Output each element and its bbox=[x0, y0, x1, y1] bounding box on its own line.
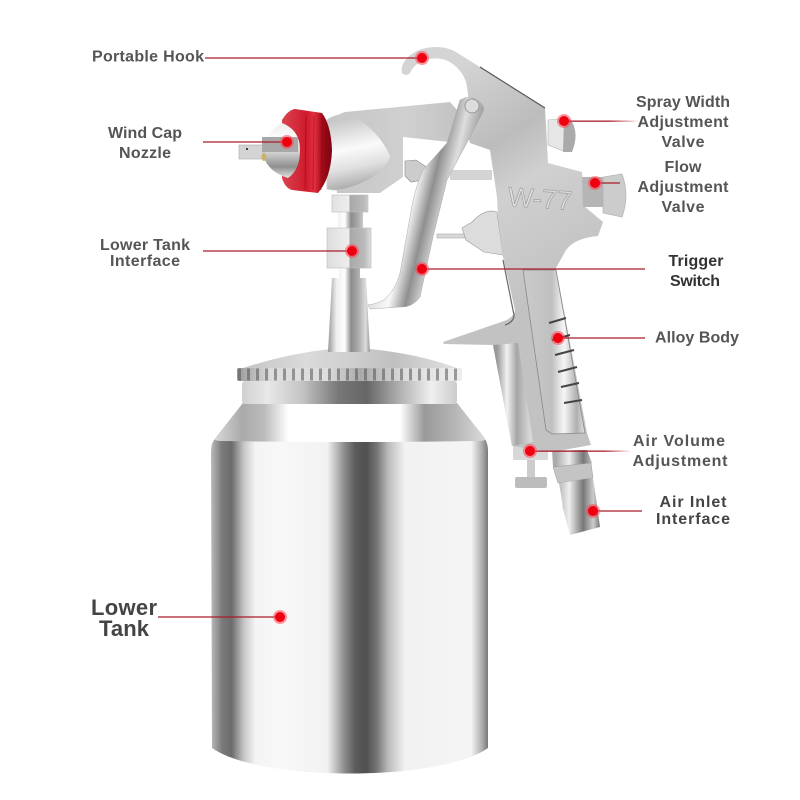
callout: lower tank bbox=[158, 610, 287, 624]
label: air inlet interface: Interface bbox=[656, 511, 730, 528]
tank lid dome bbox=[240, 349, 460, 369]
label: air volume adjustment: Adjustment bbox=[632, 453, 728, 470]
label: air inlet interface: Air Inlet bbox=[660, 494, 727, 511]
red wind cap bbox=[282, 109, 332, 193]
label: trigger switch bbox=[668, 253, 724, 290]
air rod bbox=[437, 234, 469, 238]
label: flow adjustment valve: Flow bbox=[664, 159, 702, 176]
callout: trigger switch bbox=[415, 262, 645, 276]
label: wind cap nozzle bbox=[108, 125, 182, 162]
label: wind cap nozzle: Wind Cap bbox=[108, 125, 182, 142]
body edge lines bbox=[503, 260, 514, 325]
callout: air volume bbox=[523, 444, 632, 458]
label: portable hook: Portable Hook bbox=[92, 48, 204, 66]
main body shell bbox=[402, 47, 603, 452]
grip panel bbox=[523, 270, 585, 434]
label: lower tank interface: Lower Tank bbox=[100, 237, 190, 254]
trigger bbox=[368, 97, 484, 309]
callout: flow valve bbox=[588, 176, 620, 190]
label: spray width adjustment valve: Valve bbox=[662, 134, 705, 151]
needle bar bbox=[262, 137, 298, 152]
tank collar bbox=[242, 381, 457, 404]
label: lower tank interface: Interface bbox=[110, 253, 180, 270]
tank body bbox=[211, 403, 488, 774]
label: alloy body: Alloy Body bbox=[655, 330, 739, 346]
label: air volume adjustment: Air Volume bbox=[633, 433, 725, 450]
label: lower tank interface bbox=[100, 237, 190, 270]
callout: portable hook bbox=[205, 51, 429, 65]
stem cone bbox=[328, 278, 370, 352]
label: lower tank bbox=[91, 595, 157, 641]
callout: wind cap nozzle bbox=[203, 135, 294, 149]
hex nut bbox=[327, 228, 371, 268]
grip ridges bbox=[549, 318, 582, 403]
label: air volume adjustment bbox=[632, 433, 728, 470]
label: spray width adjustment valve bbox=[636, 94, 730, 151]
label: lower tank: Tank bbox=[99, 616, 150, 641]
spray width valve bbox=[548, 118, 576, 152]
label: air inlet interface bbox=[656, 494, 730, 528]
callout: lower tank interface bbox=[203, 244, 359, 258]
trigger fitting bbox=[405, 160, 428, 182]
label: flow adjustment valve: Adjustment bbox=[638, 179, 729, 196]
tank shoulder bbox=[215, 403, 485, 442]
label: spray width adjustment valve: Adjustment bbox=[638, 114, 729, 131]
lower barrel bbox=[493, 343, 533, 446]
label: trigger switch: Switch bbox=[670, 273, 720, 290]
air volume knob bbox=[513, 446, 548, 488]
label: trigger switch: Trigger bbox=[668, 253, 724, 270]
nozzle tip bbox=[239, 145, 264, 159]
label: lower tank: Lower bbox=[91, 595, 157, 620]
rear fitting bbox=[462, 211, 503, 255]
label: flow adjustment valve bbox=[638, 159, 729, 216]
bullet housing bbox=[327, 115, 391, 190]
callout: alloy body bbox=[551, 331, 645, 345]
inlet connector bbox=[552, 450, 600, 535]
top edge shadow bbox=[480, 67, 545, 108]
label: flow adjustment valve: Valve bbox=[662, 199, 705, 216]
upper hex bbox=[332, 195, 368, 212]
callout: air inlet bbox=[586, 504, 642, 518]
nozzle dome bbox=[263, 123, 300, 178]
nozzle head bbox=[239, 109, 391, 193]
hook inner cut bbox=[405, 62, 450, 112]
label: spray width adjustment valve: Spray Width bbox=[636, 94, 730, 111]
barrel housing bbox=[330, 102, 466, 193]
nozzle hole bbox=[246, 148, 248, 150]
callout: spray width valve bbox=[557, 114, 640, 128]
label: wind cap nozzle: Nozzle bbox=[119, 145, 171, 162]
lower tank bbox=[211, 349, 488, 774]
brass tip bbox=[262, 153, 266, 161]
tank connector stem bbox=[327, 195, 371, 352]
needle rod bbox=[450, 170, 492, 180]
gun body bbox=[330, 47, 626, 535]
flow valve bbox=[582, 174, 626, 217]
trigger pivot bbox=[465, 99, 479, 113]
W-77 embossed mark: W-77 bbox=[507, 182, 573, 216]
knurled ring bbox=[237, 368, 462, 381]
